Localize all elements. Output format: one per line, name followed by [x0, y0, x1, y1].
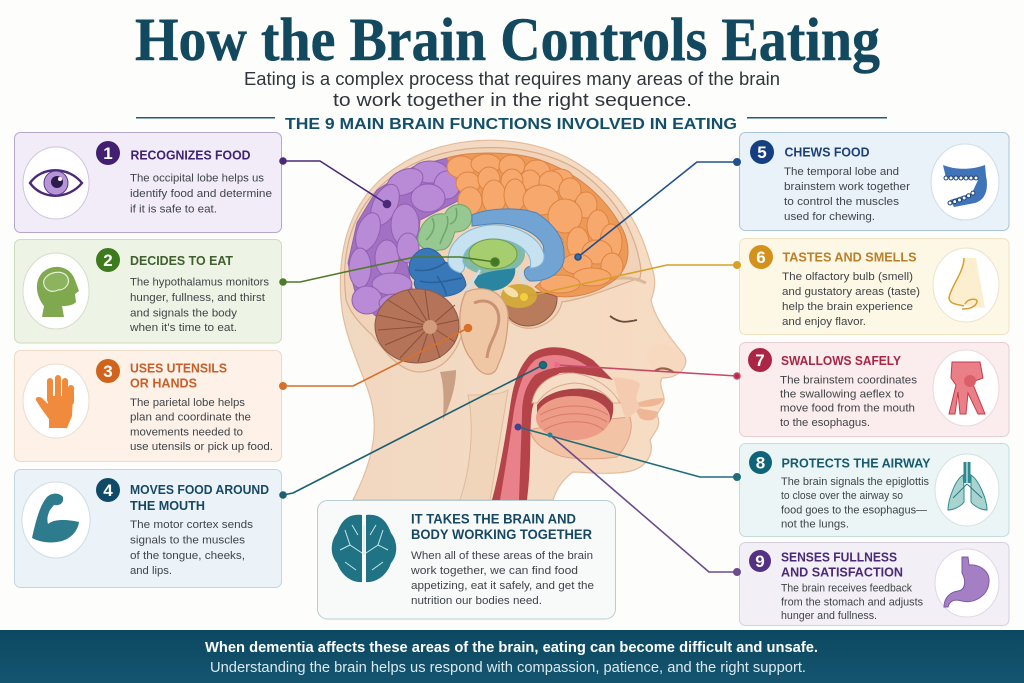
heading: TASTES AND SMELLS	[782, 250, 916, 264]
connector 2	[280, 257, 499, 285]
description: to the esophagus.	[780, 417, 870, 429]
upper teeth area	[613, 377, 640, 420]
number badge 3: 3	[103, 362, 113, 381]
skull cavity	[345, 148, 641, 372]
heading: IT TAKES THE BRAIN AND	[411, 512, 576, 526]
panel: uses utensils or hands	[14, 350, 282, 462]
heading: DECIDES TO EAT	[130, 254, 233, 268]
heading: THE MOUTH	[130, 499, 205, 513]
heading: SWALLOWS SAFELY	[781, 354, 902, 368]
icon: stomach	[935, 549, 999, 617]
neck shadow	[440, 370, 456, 420]
tongue	[536, 389, 613, 440]
blue temporal band	[472, 209, 564, 281]
description	[784, 166, 910, 223]
panel: chews food	[740, 132, 1009, 230]
description: use utensils or pick up food.	[130, 441, 273, 453]
palate	[532, 373, 620, 403]
connector lines	[280, 158, 740, 575]
description: The olfactory bulb (smell)	[782, 271, 913, 283]
footer banner: When dementia affects these areas of the brain, eating can become difficult and unsafe.	[205, 639, 818, 656]
description: if it is safe to eat.	[130, 204, 217, 216]
number badge 6: 6	[756, 248, 766, 267]
connector 6	[520, 262, 740, 301]
description: and gustatory areas (taste)	[782, 286, 920, 298]
description: movements needed to	[130, 426, 243, 438]
description: and enjoy flavor.	[782, 316, 866, 328]
description	[781, 582, 923, 622]
olfactory region	[501, 284, 537, 308]
icon: head with brain	[23, 253, 89, 329]
footer banner: Understanding the brain helps us respond with compassion, patience, and the right support.	[210, 659, 806, 676]
footer banner	[0, 630, 1024, 683]
description: the swallowing aeflex to	[780, 388, 904, 400]
description: The parietal lobe helps	[130, 397, 245, 409]
icon: flexed arm	[22, 482, 90, 558]
description: work together, we can find food	[410, 565, 578, 577]
heading	[130, 483, 269, 513]
description: signals to the muscles	[130, 534, 245, 546]
number badge 7	[748, 348, 772, 372]
heading: USES UTENSILS	[130, 362, 227, 376]
lower jaw	[530, 417, 631, 459]
description	[780, 374, 917, 429]
number badge 6	[749, 245, 773, 269]
description: move food from the mouth	[780, 402, 915, 414]
subtitle: to work together in the right sequence.	[333, 90, 692, 110]
icon: nose	[933, 248, 999, 322]
description: used for chewing.	[784, 211, 875, 223]
heading: PROTECTS THE AIRWAY	[782, 456, 931, 470]
connector 3	[280, 324, 472, 389]
panel: senses fullness and satisfaction	[740, 542, 1009, 626]
description: When all of these areas of the brain	[411, 550, 593, 562]
number badge 8	[749, 451, 772, 474]
inner teal region	[459, 233, 525, 275]
ear	[460, 289, 508, 374]
panel: protects the airway	[740, 444, 1009, 536]
head illustration	[340, 140, 686, 500]
number badge 2: 2	[103, 251, 113, 270]
description: of the tongue, cheeks,	[130, 550, 245, 562]
description: The motor cortex sends	[130, 519, 253, 531]
section heading: THE 9 MAIN BRAIN FUNCTIONS INVOLVED IN EATING	[285, 116, 737, 133]
icon: brain	[332, 515, 396, 582]
temporal brown lobe	[503, 292, 557, 326]
description	[129, 276, 269, 334]
description: from the stomach and adjusts	[781, 596, 923, 608]
icon: eye	[23, 147, 89, 219]
cerebellum	[375, 289, 459, 363]
number badge 1	[96, 141, 120, 165]
description: The brain signals the epiglottis	[781, 476, 929, 488]
green sensory region	[418, 204, 472, 250]
light blue arc	[448, 225, 544, 273]
description: nutrition our bodies need.	[411, 595, 542, 607]
icon: hand	[23, 364, 89, 438]
panel: it takes the brain and body working together	[318, 500, 616, 619]
connector 1	[280, 158, 390, 208]
thalamus	[469, 239, 517, 269]
description: and lips.	[130, 565, 172, 577]
nose wing	[647, 344, 684, 375]
icon: throat	[933, 350, 999, 426]
number badge 2	[96, 248, 120, 272]
number badge 4	[96, 478, 120, 502]
heading: MOVES FOOD AROUND	[130, 483, 269, 497]
heading	[411, 512, 592, 542]
heading: OR HANDS	[130, 376, 197, 390]
blue lower lobe	[409, 248, 466, 297]
panel: moves food around the mouth	[14, 470, 282, 588]
number badge 1: 1	[103, 144, 113, 163]
brow	[600, 278, 646, 284]
lips	[634, 398, 664, 420]
description: when it's time to eat.	[129, 322, 237, 334]
description: The occipital lobe helps us	[130, 172, 264, 184]
description: help the brain experience	[782, 301, 913, 313]
head outline	[340, 140, 686, 500]
heading: CHEWS FOOD	[784, 146, 870, 160]
description: brainstem work together	[784, 181, 910, 193]
description: plan and coordinate the	[130, 412, 251, 424]
title: How the Brain Controls Eating	[135, 7, 880, 74]
description: to control the muscles	[784, 196, 899, 208]
description	[130, 172, 272, 216]
spine	[460, 390, 508, 500]
description: identify food and determine	[130, 188, 272, 200]
panel: recognizes food	[14, 132, 282, 232]
number badge 8: 8	[756, 454, 765, 472]
heading	[781, 550, 903, 580]
connector 4	[280, 362, 546, 498]
description	[410, 550, 594, 607]
icon: jaw	[931, 144, 999, 220]
icon: lungs	[935, 454, 999, 526]
description: The brainstem coordinates	[780, 374, 917, 386]
description	[130, 519, 253, 577]
connector 9	[548, 432, 740, 575]
heading: BODY WORKING TOGETHER	[411, 527, 592, 542]
number badge 7: 7	[755, 351, 765, 370]
description: The hypothalamus monitors	[130, 276, 269, 288]
heading: AND SATISFACTION	[781, 566, 903, 580]
number badge 5: 5	[757, 143, 767, 162]
subtitle: Eating is a complex process that requires many areas of the brain	[244, 69, 780, 89]
number badge 4: 4	[103, 481, 113, 500]
panel: decides to eat	[14, 240, 282, 343]
brainstem	[474, 268, 515, 291]
panel: tastes and smells	[740, 238, 1009, 334]
number badge 3	[96, 359, 120, 383]
description: appetizing, eat it safely, and get the	[411, 580, 594, 592]
heading: RECOGNIZES FOOD	[130, 148, 250, 162]
description: hunger, fullness, and thirst	[130, 292, 266, 304]
heading: SENSES FULLNESS	[781, 550, 897, 564]
description: The temporal lobe and	[784, 166, 899, 178]
description: food goes to the esophagus—	[781, 504, 928, 516]
description: and signals the body	[130, 308, 237, 320]
number badge 9: 9	[755, 552, 765, 571]
throat cavity	[492, 347, 613, 500]
description	[781, 476, 929, 530]
purple parietal lobe	[348, 158, 460, 317]
panel: swallows safely	[740, 342, 1009, 436]
description: to close over the airway so	[781, 490, 903, 502]
connector 7	[554, 362, 740, 379]
connector 8	[514, 424, 740, 480]
number badge 5	[750, 140, 774, 164]
description: The brain receives feedback	[781, 582, 912, 594]
number badge 9	[749, 550, 771, 572]
description	[782, 271, 920, 328]
description: hunger and fullness.	[781, 610, 877, 622]
connector 5	[575, 159, 740, 260]
closed eye	[610, 316, 637, 322]
description: not the lungs.	[781, 518, 849, 530]
subtitle	[244, 69, 780, 110]
description	[130, 397, 273, 453]
orange frontal lobe	[447, 153, 628, 297]
heading	[130, 362, 227, 390]
